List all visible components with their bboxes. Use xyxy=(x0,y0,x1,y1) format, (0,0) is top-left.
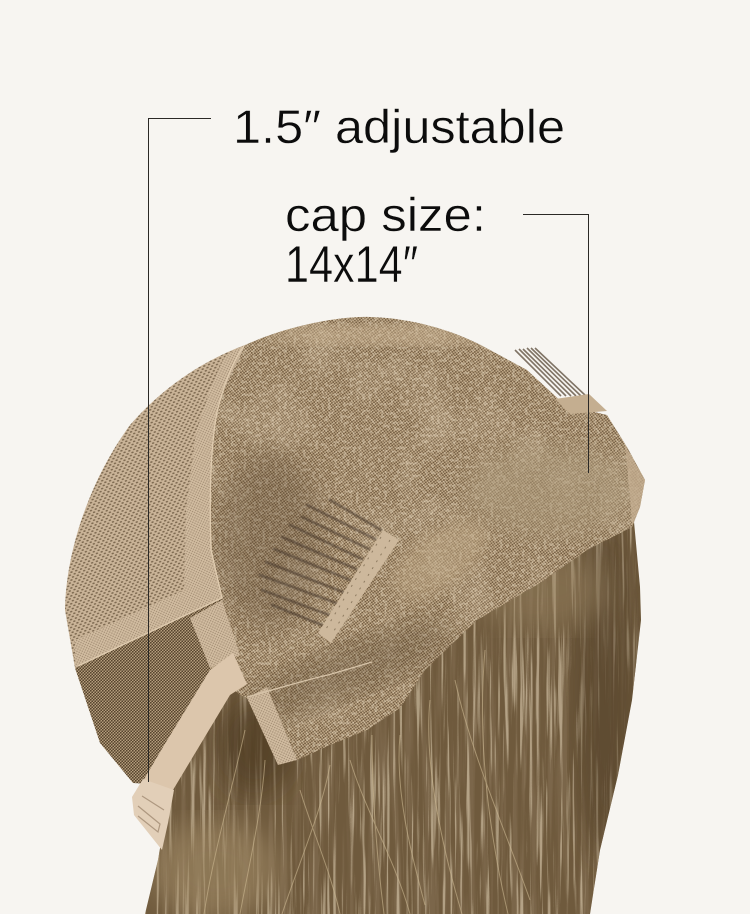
strap end clip xyxy=(132,779,174,850)
lower left dark mesh panel xyxy=(75,598,222,784)
label: adjustable: 1.5″ adjustable xyxy=(233,100,565,153)
lace wig cap xyxy=(65,310,650,850)
left panel mesh xyxy=(65,345,245,668)
cap tonal shading xyxy=(190,310,650,770)
comb teeth xyxy=(260,500,381,625)
top comb xyxy=(515,348,607,414)
seam band xyxy=(75,345,245,668)
seam highlight xyxy=(78,346,244,666)
callout line: cap size xyxy=(523,214,588,473)
cap main mesh xyxy=(190,317,645,760)
callout line: adjustable xyxy=(148,118,211,782)
side comb xyxy=(260,500,399,643)
adjustable strap xyxy=(143,653,247,790)
right edge highlight xyxy=(625,445,645,527)
label: dimensions: 14x14″ xyxy=(285,236,418,294)
clip detail xyxy=(138,796,164,832)
comb strip xyxy=(555,394,607,414)
comb strip xyxy=(318,530,399,643)
lower seam xyxy=(247,662,372,697)
ear flap xyxy=(247,687,297,765)
label: cap size: cap size: xyxy=(285,188,486,241)
wig hair xyxy=(140,500,650,914)
ear tab gusset xyxy=(190,600,240,668)
